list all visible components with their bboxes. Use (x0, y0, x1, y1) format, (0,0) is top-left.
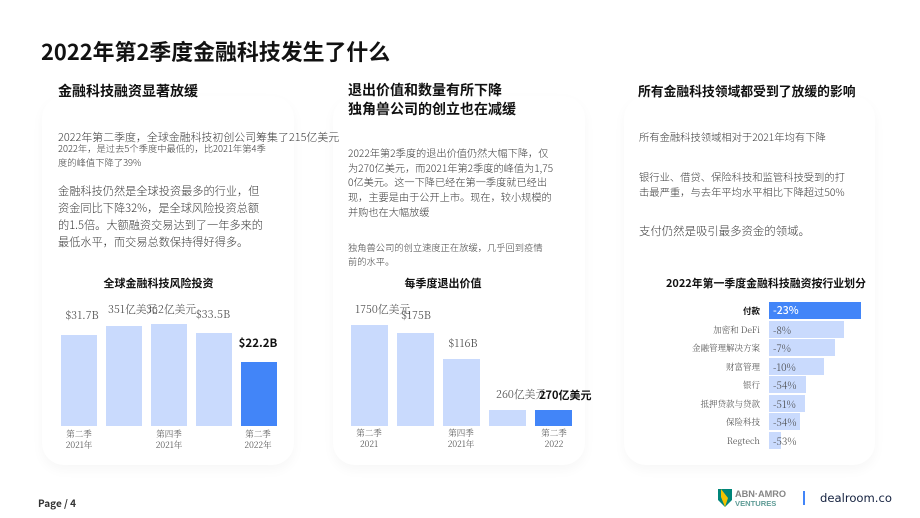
heading: exits (348, 80, 516, 118)
bar: Q3 2021 (106, 326, 142, 426)
label: regtech: Regtech (727, 435, 760, 447)
text: exits paragraph: 2022年第2季度的退出价值仍然大幅下降，仅 (348, 145, 548, 160)
axis label: Q2 2022 (244, 428, 272, 451)
text: sectors paragraph 2: 击最严重，与去年平均水平相比下降超过50% (639, 184, 845, 199)
value: banks: -54% (773, 377, 797, 392)
bar: solutions (769, 339, 835, 356)
text: funding small note: 2022年，是过去5个季度中最低的，比2021年第4季 (58, 141, 266, 155)
axis label: Q2 2021: 第二季 (66, 428, 92, 440)
axis label: Q2 2021: 2021年 (66, 439, 92, 451)
row: regtech (727, 432, 797, 449)
axis label: Q4 2021: 2021年 (448, 438, 474, 450)
label: crypto: 加密和 DeFi (713, 324, 760, 336)
axis label: Q2 2021: 第二季 (356, 427, 382, 439)
row: crypto (713, 321, 844, 338)
bar: wealth (769, 358, 824, 375)
bar: Q2 2022 (241, 362, 277, 426)
axis label: Q2 2021 (66, 428, 92, 451)
value: lending: -51% (773, 396, 796, 411)
bar: Q3 2021 (397, 333, 434, 426)
value: $31.7B: $31.7B (65, 308, 99, 323)
bar: Q4 2021 (151, 324, 187, 426)
axis label: Q2 2022: 2022 (545, 438, 563, 450)
label: insurtech: 保险科技 (726, 416, 760, 428)
bar: Q2 2021 (351, 325, 388, 426)
text: exits paragraph: 为270亿美元，而2021年第2季度的峰值为1,75 (348, 160, 553, 175)
panel: exits (333, 96, 585, 465)
axis label: Q2 2022: 2022年 (244, 439, 272, 451)
bar: payments (769, 302, 861, 319)
text: sectors paragraph 2: 银行业、借贷、保险科技和监管科技受到的打 (639, 169, 845, 184)
axis label: Q4 2021: 第四季 (156, 428, 182, 440)
value: regtech: -53% (773, 433, 797, 448)
text: funding paragraph: 金融科技仍然是全球投资最多的行业，但 (58, 182, 259, 198)
logo: dealroom.co: dealroom.co (820, 491, 892, 505)
heading: exits: 独角兽公司的创立也在减缓 (348, 98, 516, 118)
bar: regtech (769, 432, 781, 449)
text: funding paragraph: 的1.5倍。大额融资交易达到了一年多来的 (58, 217, 263, 233)
chart title: sector breakdown: 2022年第一季度金融科技融资按行业划分 (666, 275, 866, 291)
label: payments: 付款 (743, 305, 760, 317)
title: 2022年第2季度金融科技发生了什么 (41, 36, 390, 67)
text: exits paragraph (348, 145, 553, 219)
label: banks: 银行 (743, 379, 760, 391)
label: lending: 抵押贷款与贷款 (700, 398, 760, 410)
row: lending (700, 395, 805, 412)
axis label: Q2 2021: 2021 (360, 438, 378, 450)
text: funding small note (58, 141, 266, 168)
text: sectors paragraph 2 (639, 169, 845, 199)
value: wealth: -10% (773, 359, 796, 374)
axis label: Q4 2021: 2021年 (156, 439, 182, 451)
wordmark: ABN AMRO: ABN·AMRO (735, 489, 786, 499)
row: insurtech (726, 413, 800, 430)
bar: insurtech (769, 413, 800, 430)
divider (803, 491, 805, 505)
panel: sectors (624, 96, 875, 465)
bar: crypto (769, 321, 844, 338)
text: funding lead line: 2022年第二季度，全球金融科技初创公司筹集了215亿美元 (58, 129, 339, 145)
label: solutions: 金融管理解决方案 (692, 342, 760, 354)
value: 351亿美元: 351亿美元 (108, 302, 157, 317)
text: funding paragraph: 最低水平，而交易总数保持得好得多。 (58, 234, 248, 250)
bar chart: venture investment (61, 302, 277, 451)
chart title: venture investment: 全球金融科技风险投资 (104, 275, 214, 291)
axis label: Q2 2022: 第二季 (541, 427, 567, 439)
axis label: Q4 2021 (156, 428, 182, 451)
value: $175B: $175B (401, 308, 431, 323)
chart title: exit value: 每季度退出价值 (404, 275, 482, 291)
value: solutions: -7% (773, 340, 791, 355)
text: funding small note: 度的峰值下降了39% (58, 154, 141, 168)
bar: Q2 2021 (61, 335, 97, 426)
bar: lending (769, 395, 805, 412)
value: payments: -23% (773, 303, 799, 318)
heading: sectors: 所有金融科技领域都受到了放缓的影响 (638, 80, 856, 100)
bar: Q1 2022 (489, 410, 526, 426)
bar: banks (769, 376, 806, 393)
heading: exits: 退出价值和数量有所下降 (348, 80, 502, 100)
text: exits paragraph: 0亿美元。这一下降已经在第一季度就已经出 (348, 174, 547, 189)
page number: Page / 4 (38, 495, 76, 510)
label: wealth: 财富管理 (726, 361, 760, 373)
wordmark: ventures: VENTURES (735, 499, 776, 508)
value: insurtech: -54% (773, 414, 797, 429)
row: banks (743, 376, 806, 393)
axis label: Q2 2022: 第二季 (245, 428, 271, 440)
axis label: Q2 2022 (541, 427, 567, 450)
value: crypto: -8% (773, 322, 791, 337)
row: payments (743, 302, 861, 319)
bar chart: exit value (351, 302, 592, 450)
bar: Q1 2022 (196, 333, 232, 426)
text: unicorn note: 独角兽公司的创立速度正在放缓，几乎回到疫情 (348, 240, 543, 254)
value: $22.2B: $22.2B (239, 335, 277, 351)
value: 1750亿美元: 1750亿美元 (355, 302, 410, 317)
axis label: Q4 2021 (448, 427, 474, 450)
value: 270亿美元: 270亿美元 (539, 387, 591, 403)
row: wealth management (726, 358, 824, 375)
axis label: Q4 2021: 第四季 (448, 427, 474, 439)
row: wealth solutions (692, 339, 835, 356)
axis label: Q2 2021 (356, 427, 382, 450)
heading: funding: 金融科技融资显著放缓 (58, 81, 198, 101)
text: unicorn note (348, 240, 543, 268)
bar: Q2 2022 (535, 410, 572, 426)
panel: funding (42, 96, 294, 465)
bar chart: sector breakdown (692, 302, 861, 449)
value: $33.5B: $33.5B (196, 307, 230, 322)
text: funding paragraph (58, 182, 263, 250)
icon: shield (718, 489, 732, 507)
text: exits paragraph: 现，主要是由于公开上市。现在，较小规模的 (348, 189, 552, 204)
value: 362亿美元: 362亿美元 (146, 302, 196, 317)
text: sectors line 1: 所有金融科技领域相对于2021年均有下降 (639, 129, 826, 144)
text: exits paragraph: 并购也在大幅放缓 (348, 204, 430, 219)
bar: Q4 2021 (443, 359, 480, 426)
value: $116B: $116B (448, 336, 478, 351)
logo: ABN AMRO Ventures (718, 489, 786, 508)
value: 260亿美元: 260亿美元 (496, 387, 546, 402)
text: sectors line 3: 支付仍然是吸引最多资金的领域。 (639, 223, 810, 239)
text: funding paragraph: 资金同比下降32%，是全球风险投资总额 (58, 200, 259, 216)
text: unicorn note: 前的水平。 (348, 254, 394, 268)
